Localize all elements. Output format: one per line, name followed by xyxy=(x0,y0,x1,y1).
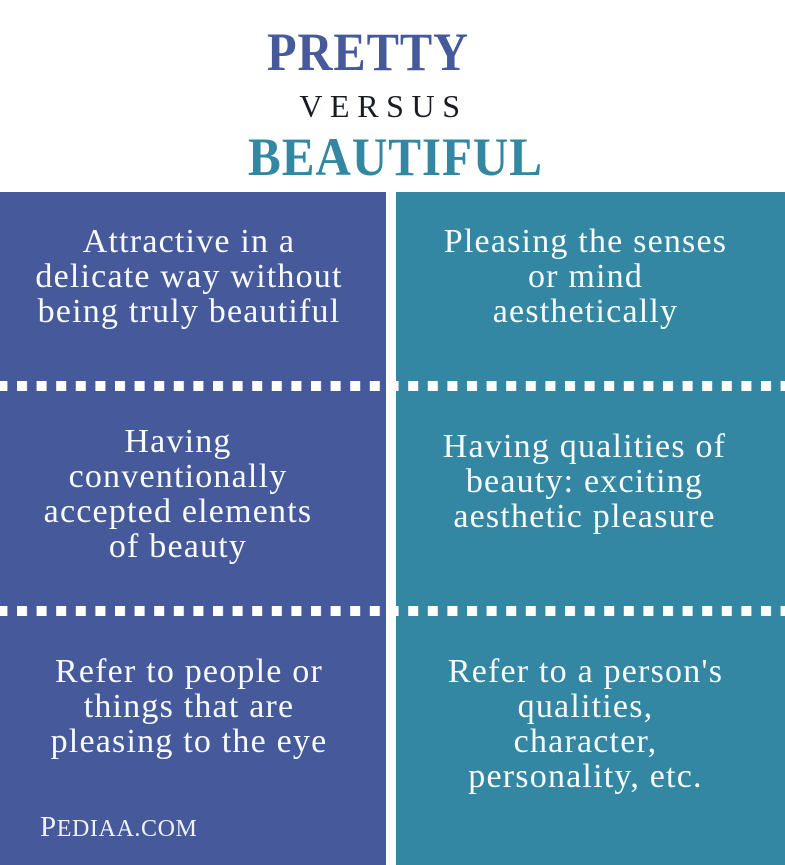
text: beautiful definition 3 xyxy=(448,653,723,795)
divider: dotted row 2 xyxy=(0,606,785,616)
text: beautiful definition 1: or mind xyxy=(528,258,643,295)
text: beautiful definition 1: Pleasing the senses xyxy=(444,223,727,260)
title: pretty: PRETTY xyxy=(267,22,469,82)
text: beautiful definition 1: aesthetically xyxy=(493,293,678,330)
panel: pretty column xyxy=(0,192,386,865)
text: beautiful definition 1 xyxy=(444,223,727,330)
text: beautiful definition 2: aesthetic pleasure xyxy=(453,498,716,535)
title: beautiful: BEAUTIFUL xyxy=(248,127,543,187)
divider: dotted row 1 xyxy=(0,381,785,391)
text: pretty definition 3: pleasing to the eye xyxy=(51,723,327,760)
text: pretty definition 1: Attractive in a xyxy=(83,223,295,260)
text: beautiful definition 3: personality, etc. xyxy=(468,758,703,795)
text: pretty definition 2 xyxy=(44,423,312,565)
text: pretty definition 2: of beauty xyxy=(109,528,247,565)
text: pretty definition 1: being truly beautiful xyxy=(38,293,340,330)
panel: beautiful column xyxy=(396,192,785,865)
logo: pediaa.com: PEDIAA.COM xyxy=(40,811,197,843)
text: pretty definition 2: Having xyxy=(124,423,232,460)
text: beautiful definition 2 xyxy=(443,428,726,535)
text: pretty definition 1 xyxy=(35,223,343,330)
text: beautiful definition 3: Refer to a person's xyxy=(448,653,723,690)
text: pretty definition 3 xyxy=(51,653,327,760)
text: beautiful definition 2: beauty: exciting xyxy=(466,463,703,500)
title: versus: VERSUS xyxy=(299,88,468,124)
text: pretty definition 1: delicate way without xyxy=(35,258,343,295)
text: pretty definition 3: Refer to people or xyxy=(55,653,323,690)
text: beautiful definition 3: character, xyxy=(514,723,657,760)
text: beautiful definition 2: Having qualities of xyxy=(443,428,726,465)
text: beautiful definition 3: qualities, xyxy=(518,688,653,725)
text: pretty definition 2: accepted elements xyxy=(44,493,312,530)
text: pretty definition 2: conventionally xyxy=(69,458,287,495)
text: pretty definition 3: things that are xyxy=(84,688,294,725)
